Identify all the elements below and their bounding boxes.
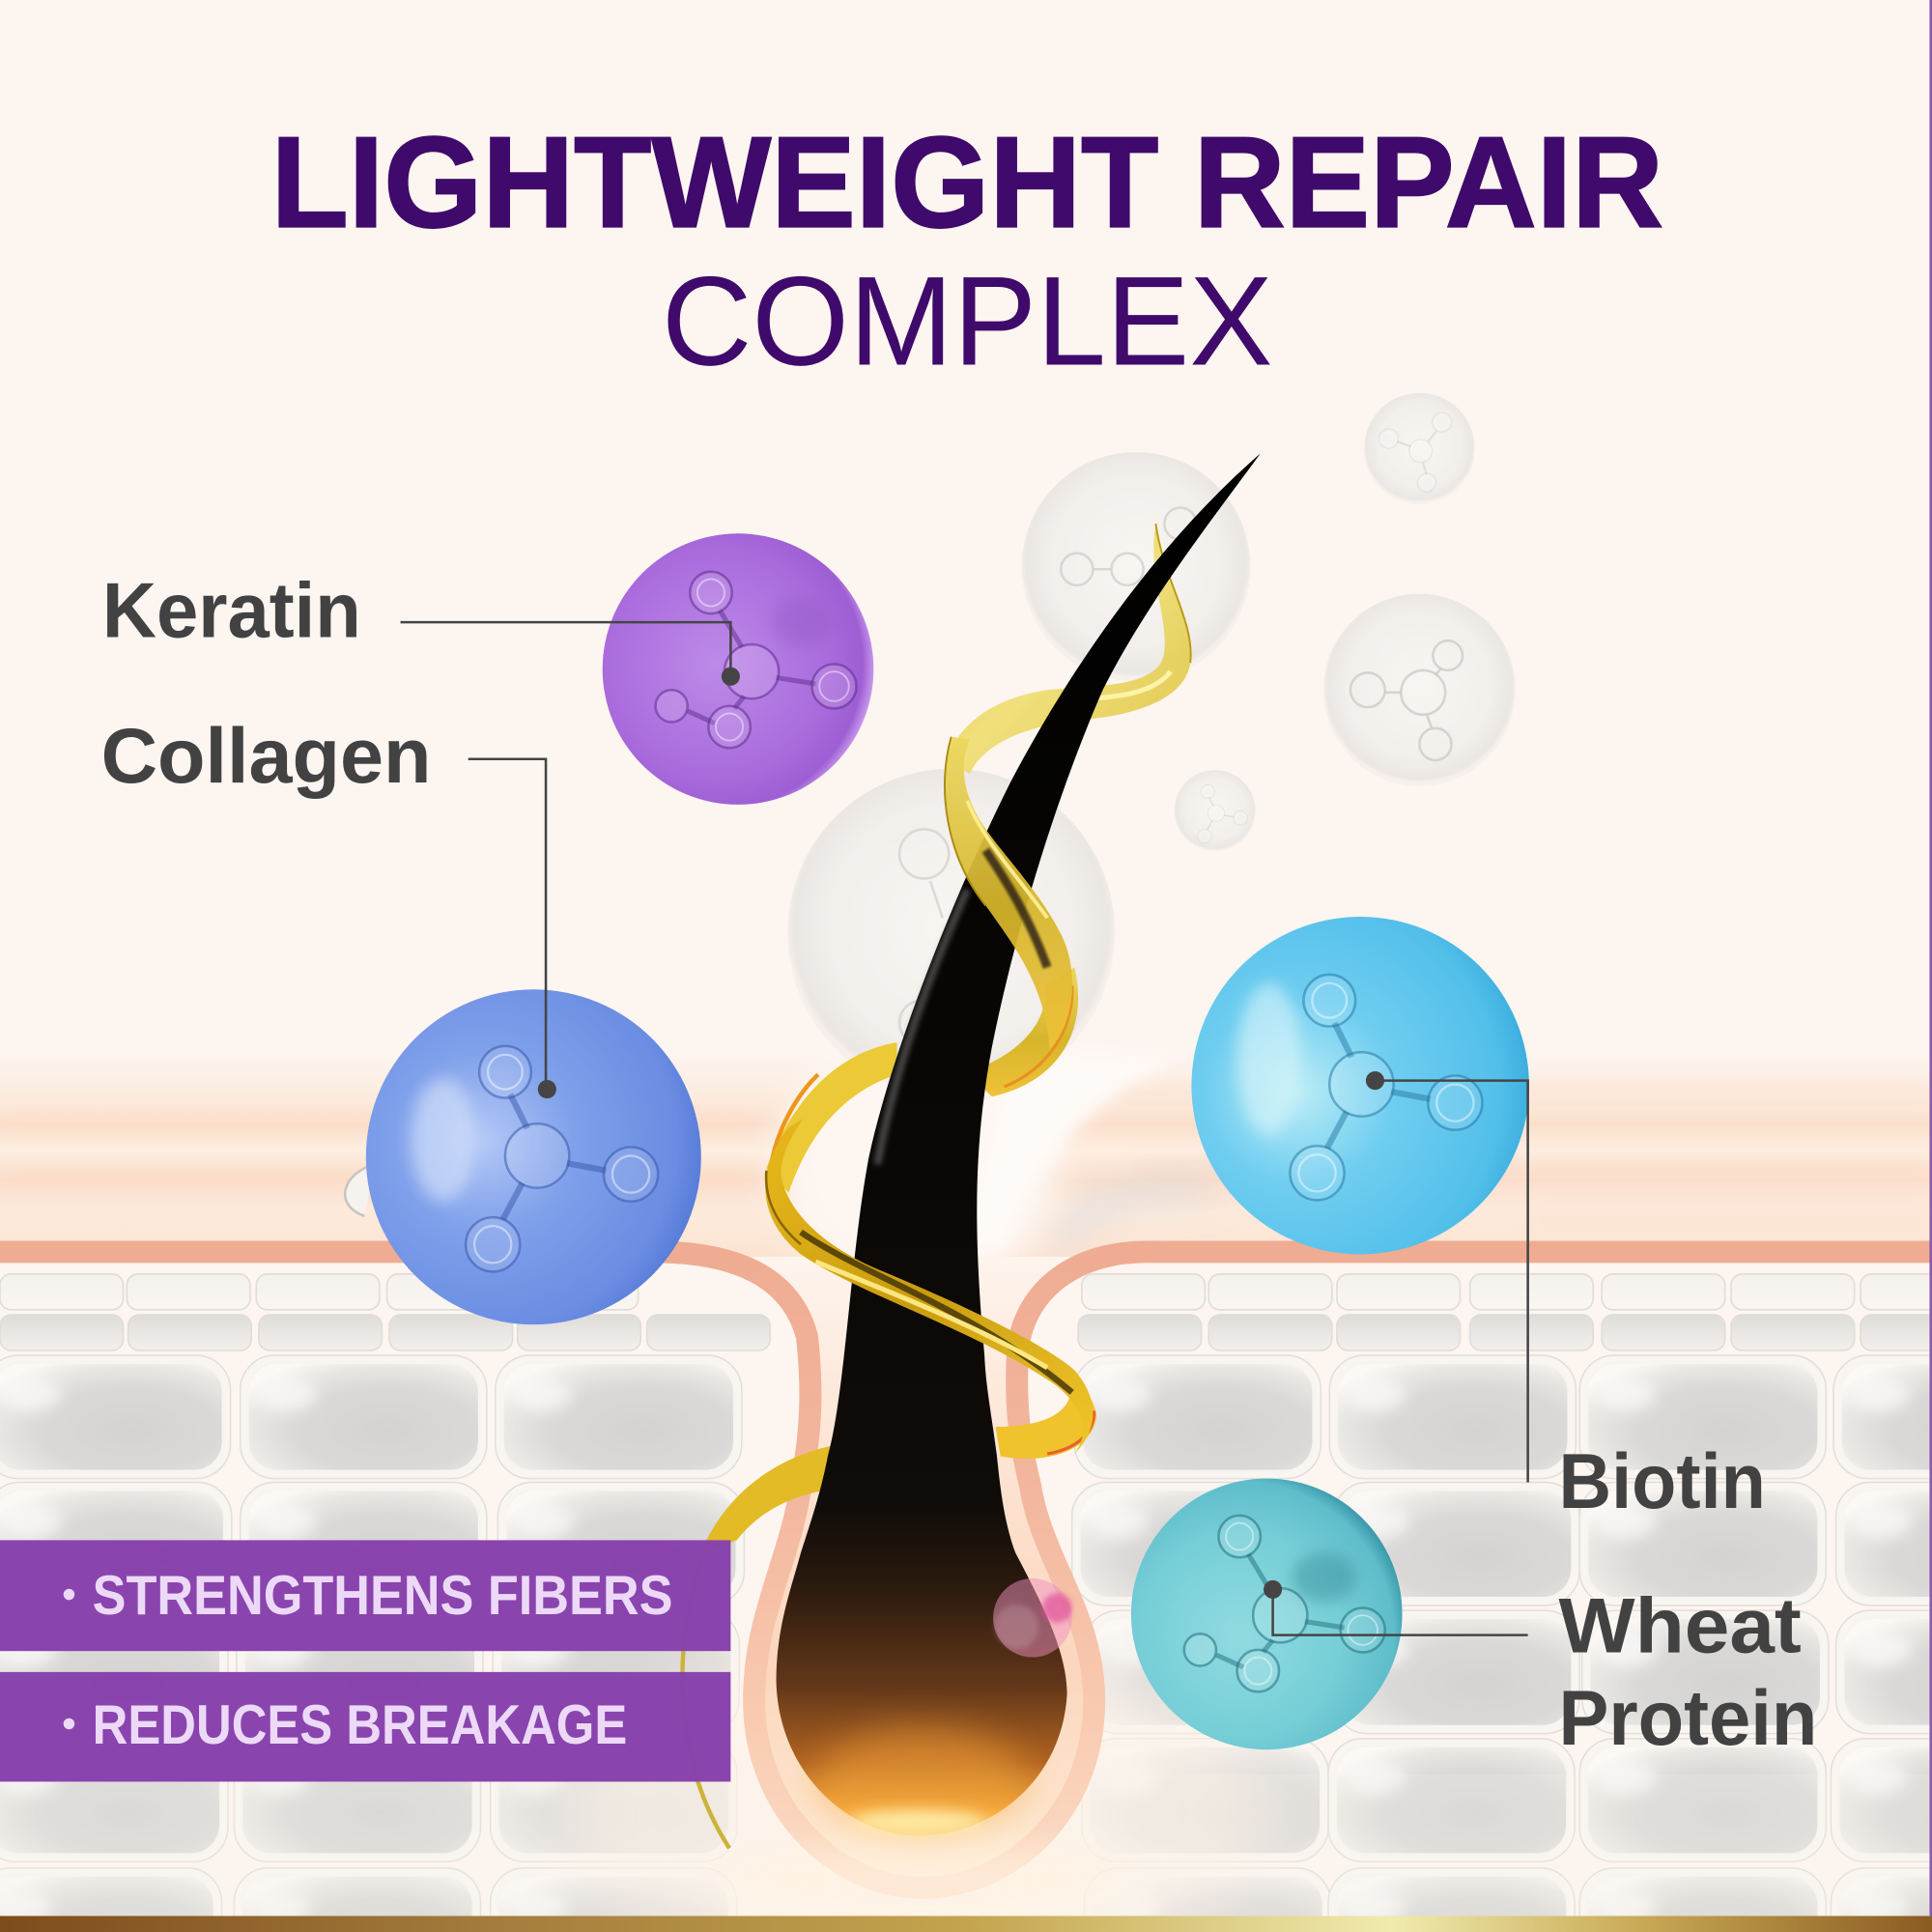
benefit bar: reduces breakage: REDUCES BREAKAGE — [93, 1694, 627, 1756]
small pink bubble — [993, 1578, 1072, 1658]
label: wheat protein: Protein — [1559, 1675, 1817, 1762]
second cell row — [0, 1315, 1932, 1350]
molecule sphere: biotin cyan — [1191, 917, 1529, 1254]
title line 2: COMPLEX — [662, 250, 1273, 392]
ghost bubble top right small — [1364, 393, 1475, 504]
ghost bubble upper — [1021, 452, 1251, 681]
ghost bubble right — [1323, 594, 1516, 786]
label: biotin: Biotin — [1559, 1438, 1766, 1525]
label: keratin: Keratin — [102, 567, 361, 654]
large cell rows left — [0, 1355, 744, 1932]
ghost bubble tiny — [1175, 770, 1256, 851]
cell layers — [0, 1274, 1932, 1932]
skin surface band — [0, 1035, 1932, 1293]
molecule sphere: collagen blue — [366, 989, 701, 1324]
label: wheat protein — [1559, 1582, 1817, 1762]
hair follicle and skin fold — [0, 1240, 1932, 1916]
ghost bubble behind collagen — [345, 1164, 375, 1216]
top cell row — [0, 1274, 1932, 1310]
ghost bubble large centre — [787, 769, 1115, 1096]
label: wheat protein: Wheat — [1559, 1582, 1802, 1669]
right edge line — [1929, 0, 1932, 1916]
connector: collagen — [469, 759, 556, 1098]
hair strand — [777, 453, 1261, 1836]
gold bottom bar — [0, 1916, 1932, 1932]
large cell rows right — [1072, 1355, 1932, 1932]
benefit bar: strengthens fibers: STRENGTHENS FIBERS — [93, 1565, 672, 1627]
connector: keratin — [401, 622, 740, 686]
benefit bar: reduces breakage — [0, 1672, 730, 1781]
molecule sphere: wheat protein teal — [1131, 1479, 1403, 1749]
connector: biotin — [1366, 1071, 1528, 1482]
connector: wheat protein — [1264, 1580, 1528, 1635]
molecule sphere: keratin purple — [603, 533, 873, 805]
title line 1: LIGHTWEIGHT REPAIR — [271, 111, 1663, 255]
label: collagen: Collagen — [101, 713, 431, 800]
benefit bar: strengthens fibers — [0, 1540, 730, 1651]
title — [271, 111, 1663, 392]
gold ribbon in front of hair — [765, 737, 1093, 1454]
ghost bubbles — [345, 393, 1516, 1216]
gold ribbon behind hair — [682, 524, 1191, 1848]
